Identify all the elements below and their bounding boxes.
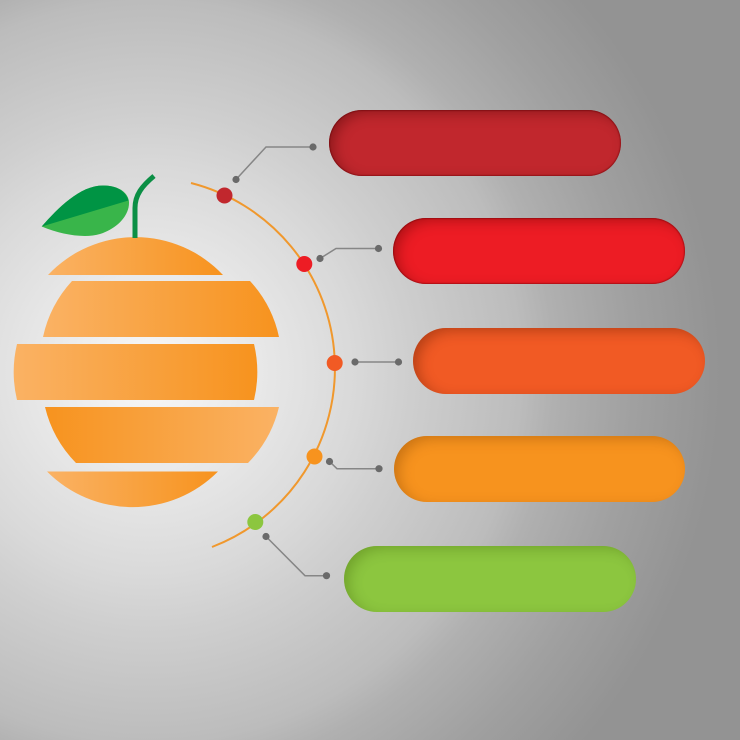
marker dot: green [247,514,263,530]
pill: red [393,218,685,284]
leader line 3 [351,358,402,366]
orange slice 5 [47,472,218,507]
orange arc [191,183,335,547]
pill: orange [394,436,684,502]
pill: dark red [329,110,621,176]
pill: orange-red [413,328,705,394]
orange slice 1 [48,237,223,275]
orange slice 3 [14,344,257,400]
stem [135,176,154,238]
pill: green [344,546,636,612]
orange slice 2 [43,281,279,337]
leader line 2 [316,245,382,262]
marker dot: orange [306,448,322,464]
leader line 4 [326,458,383,472]
marker dot: dark red [216,188,232,204]
leader line 5 [262,533,330,579]
marker dot: red [296,256,312,272]
leaf [42,186,129,236]
leader line 1 [232,143,317,183]
orange fruit [14,237,279,507]
orange slice 4 [45,407,279,463]
marker dot: orange-red [327,355,343,371]
